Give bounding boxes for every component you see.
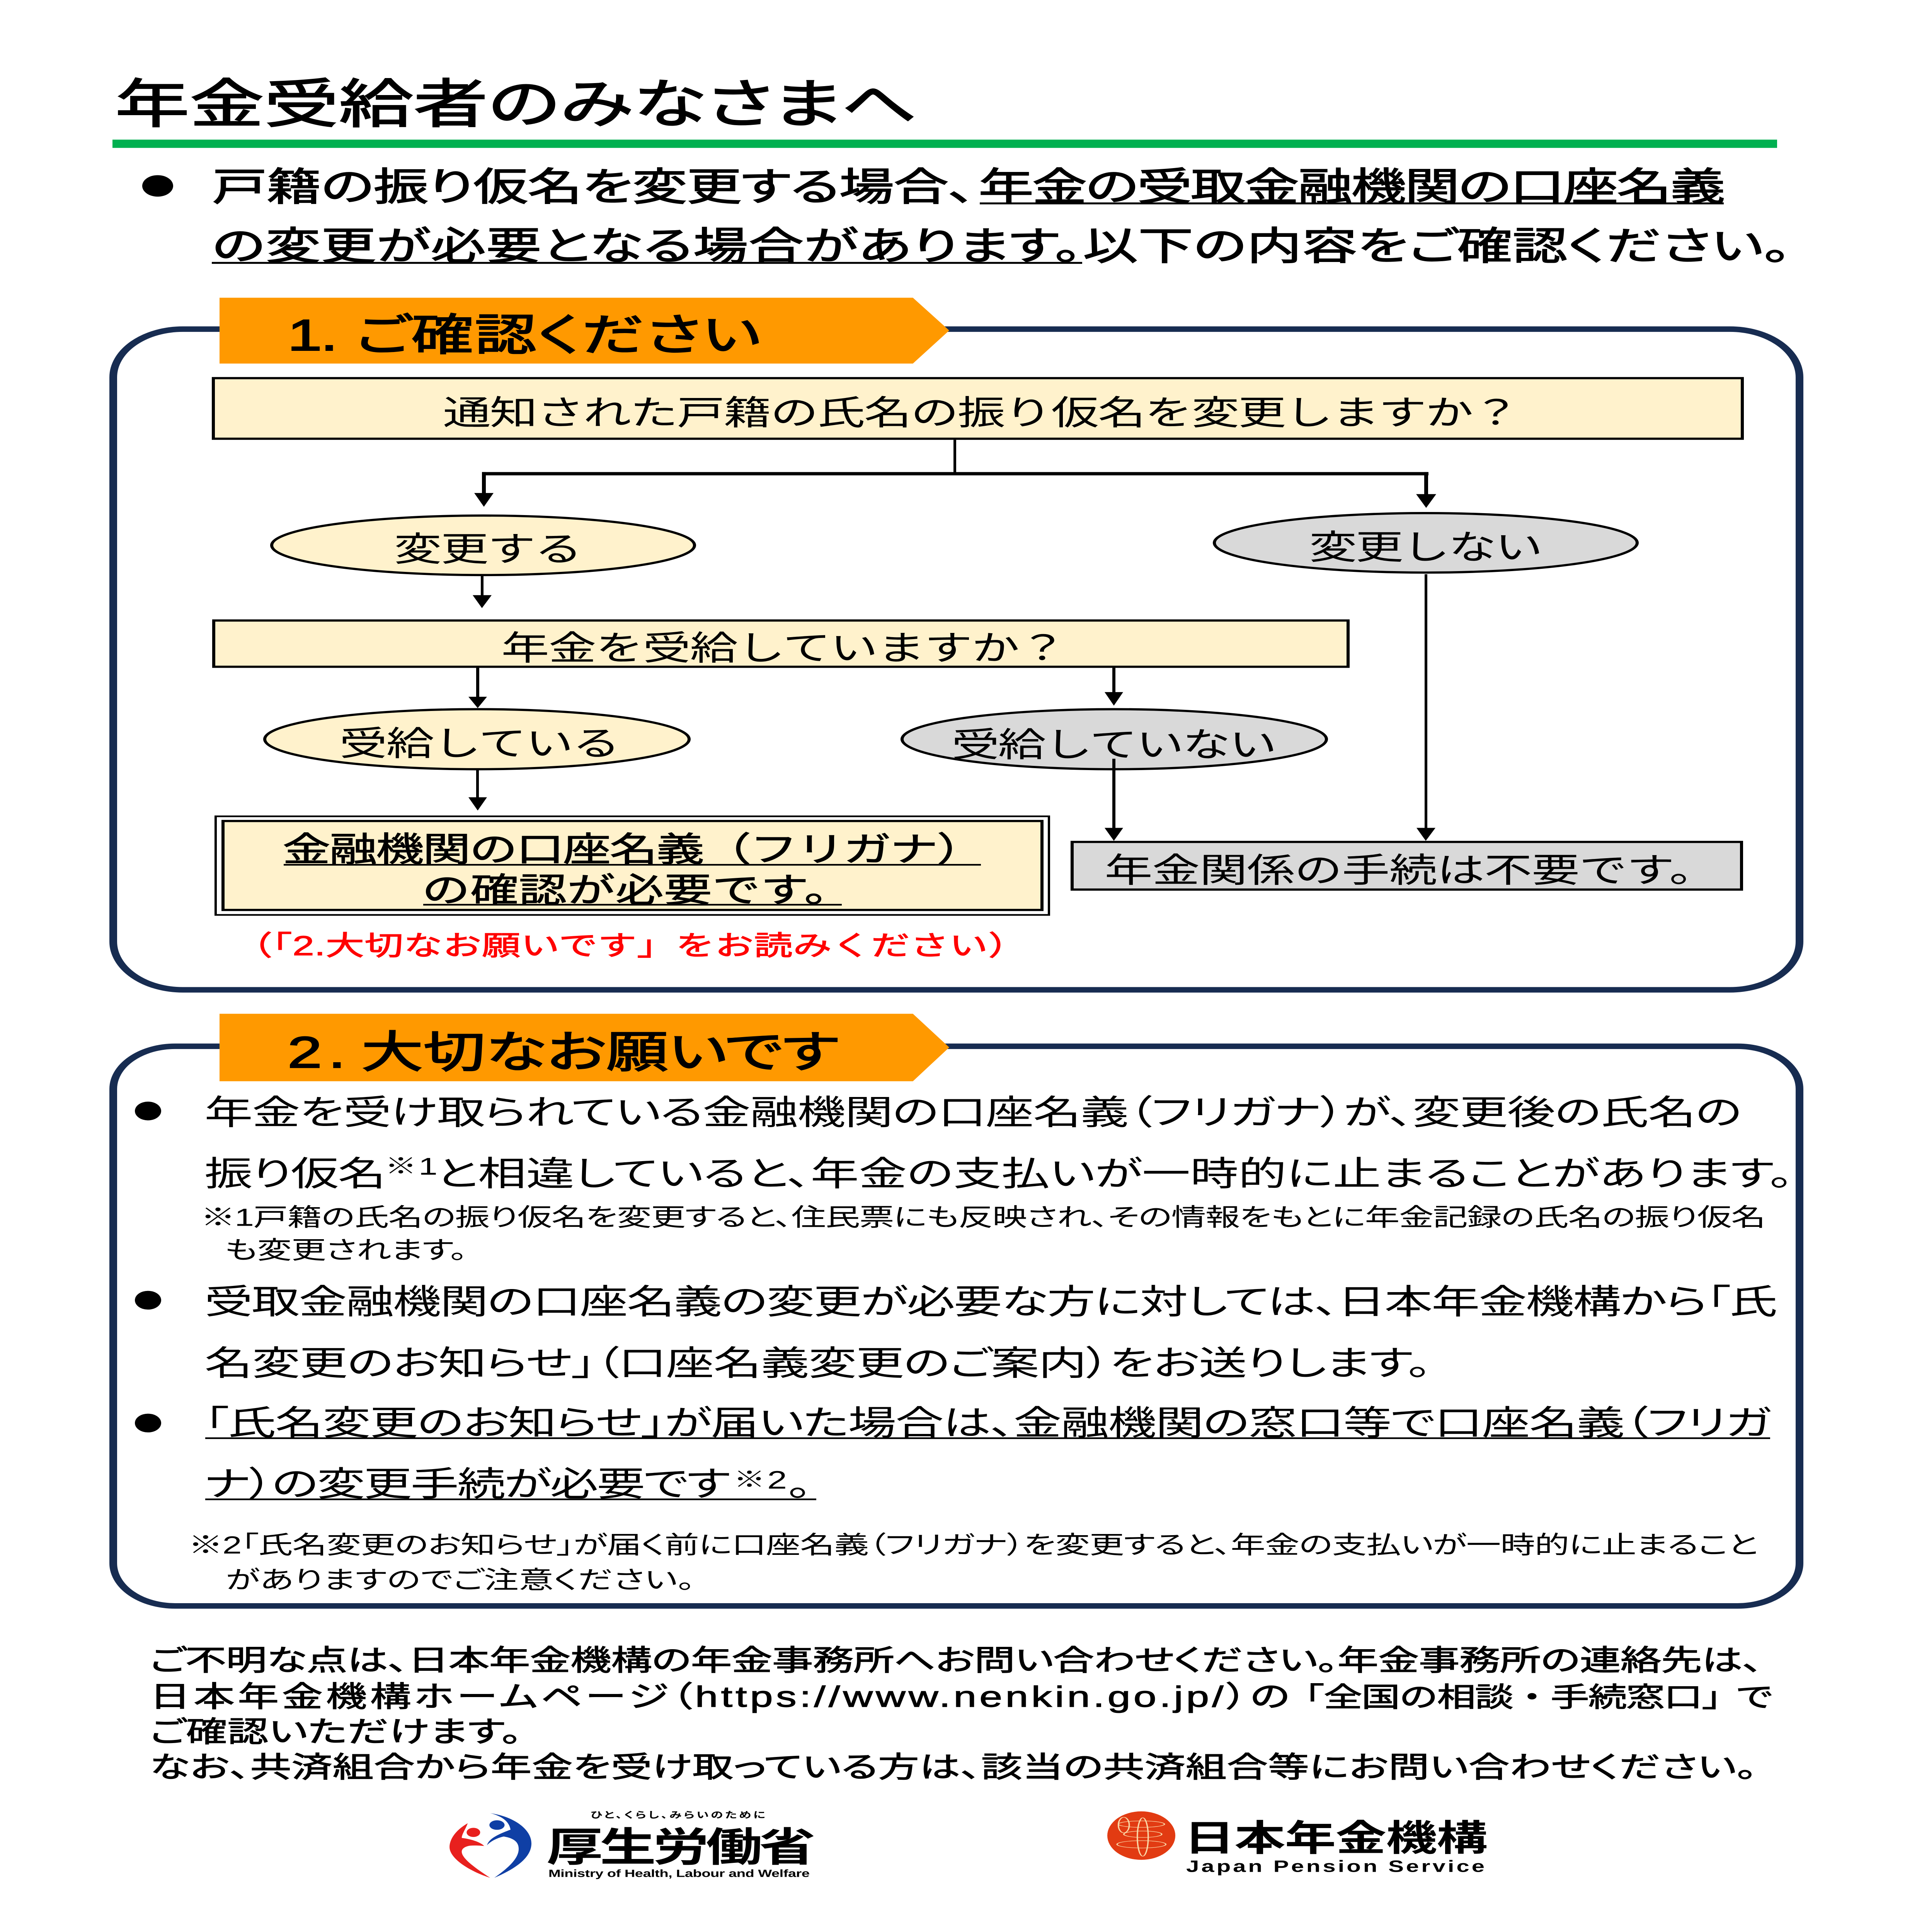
arrow: to not receiving [1105,668,1123,706]
section banner 2 [220,1014,949,1081]
arrow: receiving to account check [468,770,487,811]
contact text block [150,1644,1774,1784]
logo: Ministry of Health, Labour and Welfare [449,1810,815,1879]
ellipse: no change: 変更しない [1309,529,1543,566]
paragraph 1 [135,1094,1793,1193]
double box: account name check required: 金融機関の口座名義（フリガナ） [283,831,985,869]
footnote 1 [201,1204,1766,1264]
paragraph 3 [135,1404,1771,1503]
intro text block: の変更が必要となる場合があります。 [212,224,1082,268]
section heading 2: 大切なお願いです [361,1027,839,1077]
paragraph 3: 「氏名変更のお知らせ」が届いた場合は、金融機関の窓口等で口座名義（フリガ [204,1404,1771,1442]
contact text block: ご不明な点は、日本年金機構の年金事務所へお問い合わせください。年金事務所の連絡先は、 [150,1644,1763,1677]
paragraph 1: 1 [419,1153,438,1180]
ellipse: not receiving [902,709,1326,769]
panel outline [113,1046,1800,1606]
question box: furigana change [213,378,1742,439]
arrow: no change to no procedure [1416,574,1435,841]
bullet 3 [135,1414,161,1432]
contact text block: ご確認いただけます。 [150,1716,522,1748]
footnote 2: ※2「氏名変更のお知らせ」が届く前に口座名義（フリガナ）を変更すると、年金の支払いが一時的に止まること [188,1532,1758,1559]
branch connector with arrows [474,440,1436,508]
intro text block: 以下の内容をご確認ください。 [1083,224,1791,268]
MHLW tagline: ひと、くらし、みらいのために [591,1810,765,1820]
gray box: no pension procedure needed: 年金関係の手続は不要です。 [1105,852,1717,889]
paragraph 3: ナ）の変更手続が必要です [204,1465,730,1503]
red note: （「2.大切なお願いです」をお読みください） [234,930,1027,961]
paragraph 3: ※ [734,1467,765,1492]
green title rule [112,139,1777,148]
footnote 1: ※1戸籍の氏名の振り仮名を変更すると、住民票にも反映され、その情報をもとに年金記録の氏名の振り仮名 [201,1204,1766,1231]
arrow: to receiving [468,668,487,708]
question box: receiving pension: 年金を受給していますか？ [501,629,1067,667]
icon: MHLW heart emblem [449,1813,531,1878]
footnote 2 [188,1532,1758,1594]
contact text block: 「全国の相談・手続窓口」 [1286,1682,1740,1713]
paragraph 2: 名変更のお知らせ」（口座名義変更のご案内）をお送りします。 [204,1344,1432,1383]
logo: Japan Pension Service [1107,1811,1488,1876]
section heading 1: ご確認ください [356,310,761,360]
paragraph 1: 年金を受け取られている金融機関の口座名義（フリガナ）が、変更後の氏名の [204,1094,1742,1132]
contact text block: で [1735,1682,1774,1713]
contact text block: 日本年金機構ホームページ（https://www.nenkin.go.jp/）の [150,1680,1290,1713]
JPS name: 日本年金機構 [1184,1818,1488,1859]
ellipse: not receiving: 受給していない [952,726,1277,764]
bullet 1 [135,1102,161,1121]
intro bullet [142,175,173,197]
icon: JPS round emblem [1107,1811,1175,1860]
question box: receiving pension [214,621,1348,667]
paragraph 2: 受取金融機関の口座名義の変更が必要な方に対しては、日本年金機構から「氏 [204,1283,1777,1321]
question box: furigana change: 通知された戸籍の氏名の振り仮名を変更しますか？ [443,394,1520,432]
title: 年金受給者のみなさまへ [115,75,917,134]
ellipse: receiving: 受給している [339,725,620,763]
bullet 2 [135,1291,161,1310]
panel outline [113,329,1800,990]
footnote 1: も変更されます。 [225,1236,467,1264]
JPS English name: Japan Pension Service [1186,1857,1485,1876]
paragraph 3: 。 [788,1465,812,1503]
arrow: change to question 2 [473,576,492,608]
double box: account name check required: の確認が必要です。 [422,871,852,910]
panel: 1. confirm [113,298,1800,990]
section banner 1 [220,298,949,364]
intro text block [142,165,1791,268]
ellipse: no change [1214,513,1637,573]
footnote 2: がありますのでご注意ください。 [226,1566,695,1594]
paragraph 1: と相違していると、年金の支払いが一時的に止まることがあります。 [436,1155,1793,1193]
paragraph 1: 振り仮名 [204,1155,386,1193]
intro text block: 年金の受取金融機関の口座名義 [979,165,1725,209]
paragraph 3: 2 [767,1466,787,1494]
MHLW English name: Ministry of Health, Labour and Welfare [548,1868,810,1879]
panel: 2. important request [113,1014,1800,1606]
MHLW name: 厚生労働省 [546,1825,815,1870]
paragraph 2 [135,1283,1777,1383]
paragraph 1: ※ [385,1154,417,1179]
contact text block: なお、共済組合から年金を受け取っている方は、該当の共済組合等にお問い合わせください。 [150,1751,1757,1784]
arrow: not receiving to no procedure [1105,759,1123,841]
intro text block: 戸籍の振り仮名を変更する場合、 [212,165,976,209]
section heading 2: 2. [288,1027,346,1077]
section heading 1: 1. [288,310,338,360]
ellipse: receiving [265,709,689,769]
ellipse: change [272,515,695,575]
double box: account name check required [216,816,1049,915]
ellipse: change: 変更する [394,531,582,568]
